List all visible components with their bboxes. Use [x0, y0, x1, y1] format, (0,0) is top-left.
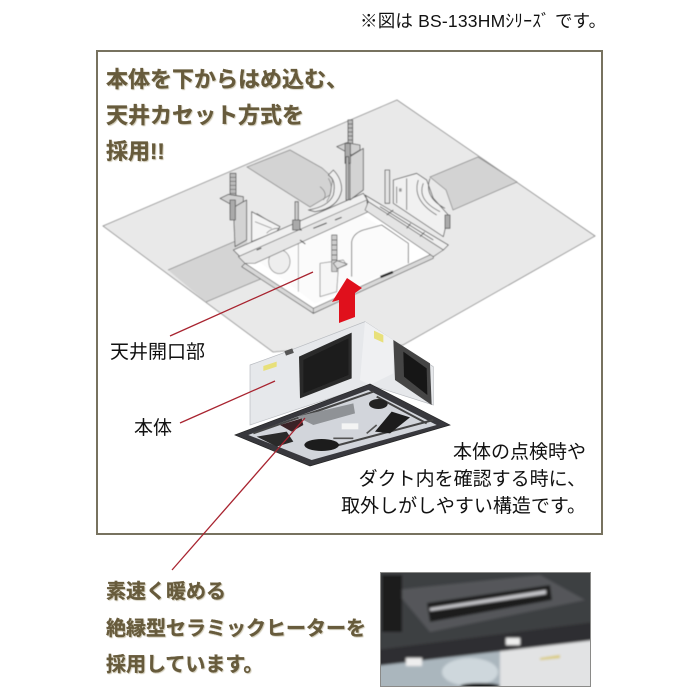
main illustration: [102, 99, 596, 687]
bolt: [332, 235, 347, 272]
right flange box: [393, 173, 448, 237]
inner box panels: [297, 243, 299, 292]
beams: [233, 193, 368, 260]
left lower band: [168, 237, 263, 302]
label: ceiling opening: 天井開口部: [110, 342, 205, 363]
ceiling board with ducts and frame: [103, 100, 595, 352]
lower rails: [242, 263, 313, 313]
red arrow: [332, 278, 362, 323]
vent side: [393, 340, 432, 405]
heading: main: 本体を下からはめ込む、 天井カセット方式を 採用!!: [106, 67, 348, 164]
right duct: [430, 157, 517, 210]
photo of heater: [376, 568, 595, 691]
note: model series: ※図は BS-133HMｼﾘｰｽﾞ です。: [360, 11, 606, 31]
label: unit: 本体: [134, 418, 172, 439]
left duct: [247, 150, 333, 207]
labels yellow: [263, 362, 277, 371]
vent front: [299, 333, 352, 398]
heading: heater: 素速く暖める 絶縁型セラミックヒーターを 採用しています。: [106, 581, 366, 676]
red leader lines: [170, 272, 313, 570]
hanging bolts and brackets: [220, 120, 450, 247]
ceiling opening: [220, 120, 450, 313]
bottom panel: [235, 384, 450, 466]
far side walls: [257, 213, 408, 303]
unit body: [235, 322, 450, 466]
text: removal note: 本体の点検時や ダクト内を確認する時に、 取外しがしやすい構造です。: [341, 442, 586, 517]
left back box behind beam: [252, 212, 280, 242]
main panel frame: [96, 50, 603, 535]
duct flanges: [308, 170, 342, 212]
